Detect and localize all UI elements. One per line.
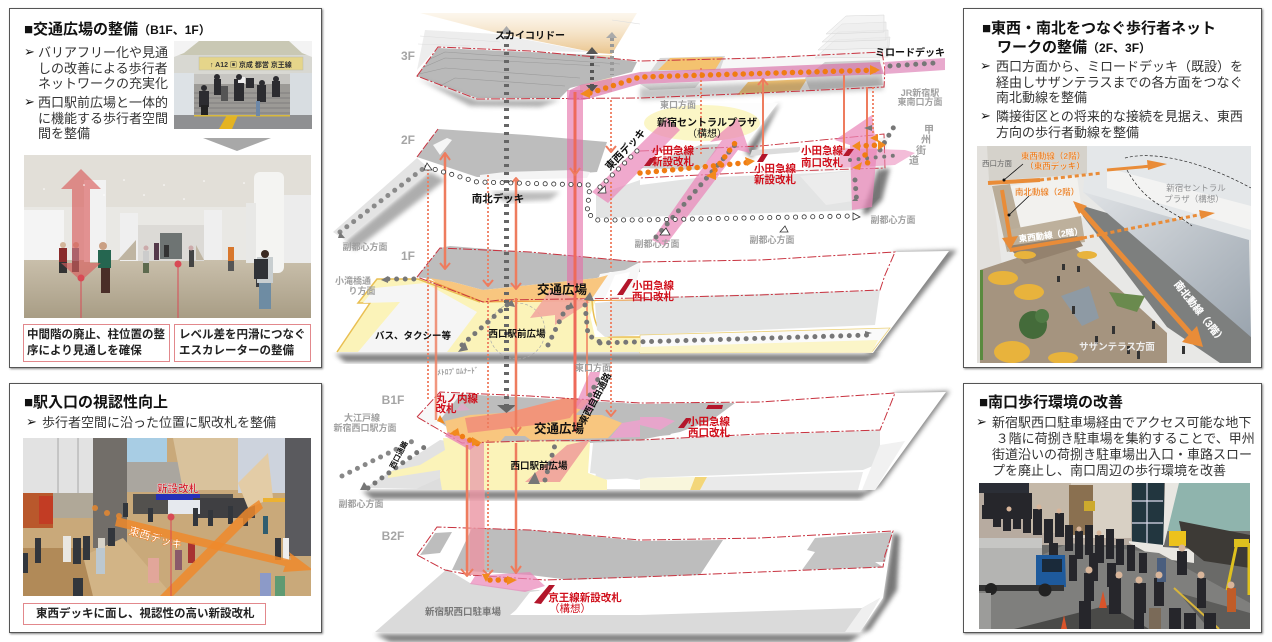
- plaza slab with shadow: [745, 103, 780, 158]
- gray dotted routes: [340, 63, 935, 488]
- red gate labels: 西口改札: [632, 290, 674, 303]
- orange routes on photo: [988, 166, 1203, 341]
- gray direction labels: 副都心方面: [338, 498, 384, 509]
- bullet text: [976, 415, 1255, 478]
- black place labels: バス、タクシー等: [375, 330, 451, 342]
- crowd: [982, 493, 1236, 629]
- bullet list: ➢: [980, 59, 991, 74]
- red gate labels: 改札: [436, 402, 457, 415]
- gray direction labels: 甲: [924, 124, 934, 136]
- outlines B1F: [417, 392, 895, 443]
- bullet list: 経由しサザンテラスまでの各方面をつなぐ: [996, 75, 1242, 90]
- bullet text: プを廃止し、南口周辺の歩行環境を改善: [992, 463, 1226, 478]
- red overhead arrow: [61, 169, 101, 281]
- callout: escalator: レベル差を円滑につなぐ: [179, 329, 306, 341]
- heading: [982, 20, 1216, 56]
- bullet list: 方向の歩行者動線を整備: [996, 125, 1139, 140]
- leader lines: [78, 261, 181, 324]
- sky corridor volume: [420, 13, 637, 54]
- black place labels: （構想）: [687, 127, 727, 140]
- floor 3F: [417, 13, 890, 107]
- gray direction labels: 副都心方面: [749, 234, 795, 245]
- mirod deck band: [885, 58, 945, 74]
- bullet list: ネットワークの充実化: [38, 76, 168, 91]
- west plaza yellow: [337, 279, 640, 352]
- bullet list: ➢: [24, 45, 35, 60]
- heading: ■駅入口の視認性向上: [24, 394, 168, 411]
- photo: aerial of south terrace: プラザ（構想）: [1164, 194, 1224, 204]
- black place labels: ミロードデッキ: [875, 46, 945, 59]
- gray direction labels: JR新宿駅: [901, 87, 939, 98]
- bullet list: ➢: [24, 95, 35, 110]
- bullet list: しの改善による歩行者: [38, 61, 168, 76]
- illustrated people: [59, 242, 273, 309]
- black place labels: スカイコリドー: [495, 30, 565, 42]
- outlines 2F: [417, 129, 438, 157]
- gray direction labels: り方面: [348, 285, 376, 296]
- black place labels: 西口駅前広場: [488, 328, 546, 340]
- photo: renovated concourse: [24, 155, 311, 318]
- bullet list: 南北動線を整備: [996, 90, 1087, 105]
- transport plaza 1F: [430, 275, 608, 302]
- bullet list: 西口駅前広場と一体的: [38, 95, 168, 110]
- deck label on photo: 東西デッキ: [127, 523, 184, 552]
- floor labels: 3F: [401, 49, 415, 63]
- black place labels: 交通広場: [534, 421, 584, 436]
- callout: sight lines: 中間階の廃止、柱位置の整: [27, 329, 165, 341]
- photo: crowded south exit: [979, 483, 1250, 629]
- photo labels: 東西動線（2階）: [1021, 151, 1085, 161]
- callout: escalator: エスカレーターの整備: [179, 345, 294, 357]
- gray direction labels: 東南口方面: [897, 96, 943, 107]
- bullet list: [24, 45, 168, 141]
- heading: ■東西・南北をつなぐ歩行者ネット: [982, 20, 1216, 37]
- orange dotted routes: [455, 70, 880, 580]
- gray direction labels: 小滝橋通: [335, 275, 371, 286]
- rotated deck labels: [387, 126, 648, 470]
- photo labels: [1015, 151, 1228, 346]
- photo labels: 南北動線（3階）: [1171, 278, 1228, 346]
- panel: south exit environment: [963, 383, 1262, 633]
- callout: sight lines: 序により見通しを確保: [27, 345, 142, 357]
- arrow: before to after: [203, 138, 271, 151]
- white circle south deck: [427, 148, 853, 220]
- black place labels: [375, 30, 945, 472]
- orange routes: [115, 517, 313, 572]
- orange triangles: [437, 65, 886, 585]
- truck: [979, 538, 1042, 585]
- panel: station entrance visibility: [9, 383, 322, 633]
- bullet list: [980, 59, 1243, 140]
- bullet list: ➢: [980, 109, 991, 124]
- black place labels: 南北デッキ: [472, 192, 524, 205]
- bullet text: ➢: [976, 415, 987, 430]
- vertical connection arrows: [428, 68, 873, 576]
- dark gray triangles: [338, 125, 872, 490]
- red gate labels: 小田急線: [754, 162, 796, 175]
- floor labels: [382, 49, 415, 543]
- floor 2F: [333, 103, 890, 250]
- bullet list: 間を整備: [38, 126, 90, 141]
- white triangle markers: [424, 163, 860, 235]
- red gate labels: 南口改札: [801, 156, 843, 169]
- photo: aerial of south terrace: 新宿セントラル: [1166, 183, 1226, 193]
- rotated deck labels: 西口通路: [387, 439, 410, 470]
- floor B1F: [362, 391, 950, 499]
- floor labels: B1F: [382, 393, 404, 407]
- gray direction labels: 大江戸線: [344, 412, 380, 423]
- bullet list: 西口方面から、ミロードデッキ（既設）を: [996, 59, 1243, 74]
- red gate labels: 新設改札: [754, 173, 796, 186]
- outlines 1F: [417, 248, 895, 302]
- photo: aerial of south terrace: [977, 146, 1251, 363]
- people: [23, 503, 289, 596]
- photo: station stairs: ↑ A12 ▣ 京成 都営 京王線: [210, 60, 292, 69]
- 3F pink band: [568, 62, 884, 100]
- gray direction labels: 新宿駅西口駐車場: [425, 606, 501, 618]
- gate marks 2F: [644, 149, 854, 166]
- transport plaza B1F: [445, 398, 622, 443]
- photo: new gate: [23, 438, 311, 596]
- bullet list: 隣接街区との将来的な接続を見据え、東西: [996, 109, 1243, 124]
- heading: ■交通広場の整備（B1F、1F）: [24, 21, 211, 38]
- gray direction labels: 新宿西口駅方面: [333, 422, 397, 433]
- red gate labels: 小田急線: [632, 279, 674, 292]
- red gate labels: [436, 144, 843, 615]
- callout: sight lines: [23, 324, 170, 362]
- black place labels: 新宿セントラルプラザ: [657, 116, 757, 129]
- gray direction labels: 州: [921, 134, 931, 146]
- floor outline: [417, 47, 885, 99]
- heading: ■南口歩行環境の改善: [979, 394, 1123, 411]
- photo: aerial of south terrace: 西口方面: [982, 158, 1012, 168]
- panel: pedestrian network: [963, 8, 1262, 368]
- east west deck arrow: [592, 118, 680, 203]
- gray direction labels: [333, 87, 943, 618]
- red gate labels: 京王線新設改札: [548, 591, 622, 604]
- bullet text: ３階に荷捌き駐車場を集約することで、甲州: [996, 431, 1255, 446]
- gray direction labels: ﾒﾄﾛﾌﾟﾛﾑﾅｰﾄﾞ: [437, 366, 479, 377]
- red gate labels: （構想）: [549, 602, 591, 615]
- black place labels: 西口駅前広場: [510, 460, 568, 472]
- gray direction labels: 街: [916, 144, 926, 157]
- B1F pink: [574, 372, 600, 412]
- rotated deck labels: 東西自由通路: [577, 370, 614, 427]
- floor B2F: [375, 527, 900, 642]
- red gate labels: 小田急線: [688, 415, 730, 428]
- bullet list: バリアフリー化や見通: [38, 45, 168, 60]
- photo: aerial of south terrace: サザンテラス方面: [1079, 341, 1155, 353]
- bullet: 歩行者空間に沿った位置に駅改札を整備: [42, 415, 276, 430]
- central floor diagram: [333, 13, 958, 642]
- bullet text: 新宿駅西口駐車場経由でアクセス可能な地下: [992, 415, 1251, 430]
- red gate labels: 小田急線: [801, 144, 843, 157]
- callout: deck gate: [23, 603, 266, 625]
- bullet list: に機能する歩行者空間: [38, 111, 168, 126]
- red gate labels: 西口改札: [688, 426, 730, 439]
- red gate labels: 丸ノ内線: [436, 392, 478, 405]
- callout: deck gate: 東西デッキに面し、視認性の高い新設改札: [36, 608, 254, 620]
- pink pedestrian arrows: [445, 58, 945, 592]
- gray direction labels: 道: [909, 154, 919, 167]
- right tower stack: [815, 15, 890, 58]
- red gate labels: 新設改札: [652, 155, 694, 168]
- bullet: ➢: [26, 415, 37, 430]
- vertical dashed core: [497, 26, 617, 413]
- floor labels: B2F: [382, 529, 404, 543]
- panel: transport plaza: [9, 8, 322, 368]
- gray direction labels: 副都心方面: [634, 238, 680, 249]
- gray direction labels: 東口方面: [575, 362, 611, 373]
- gray direction labels: 東口方面: [660, 99, 696, 110]
- photo labels: （東西デッキ）: [1025, 161, 1085, 171]
- Keio new gate: [534, 585, 555, 604]
- floor 1F: [335, 246, 957, 362]
- photo labels: 南北動線（2階）: [1015, 187, 1079, 197]
- red gate labels: 小田急線: [652, 144, 694, 157]
- callout: escalator: [174, 324, 311, 362]
- floor labels: 2F: [401, 133, 415, 147]
- gray direction labels: 副都心方面: [342, 241, 388, 252]
- black place labels: 交通広場: [537, 282, 587, 297]
- umbrellas: [988, 251, 1097, 364]
- bullet text: 街道沿いの荷捌き駐車場出入口・車路スロー: [992, 447, 1252, 462]
- outlines B2F: [417, 527, 893, 580]
- photo labels: 東西動線（2階）: [1018, 226, 1083, 244]
- central plaza ellipse: [644, 105, 760, 141]
- vertical pink column: [567, 90, 583, 285]
- floor labels: 1F: [401, 249, 415, 263]
- gray direction labels: 副都心方面: [870, 214, 916, 225]
- rotated deck labels: 東西デッキ: [603, 126, 648, 173]
- photo: station stairs: [174, 41, 312, 129]
- new gate label: 新設改札: [157, 482, 199, 495]
- heading: ワークの整備（2F、3F）: [997, 39, 1151, 56]
